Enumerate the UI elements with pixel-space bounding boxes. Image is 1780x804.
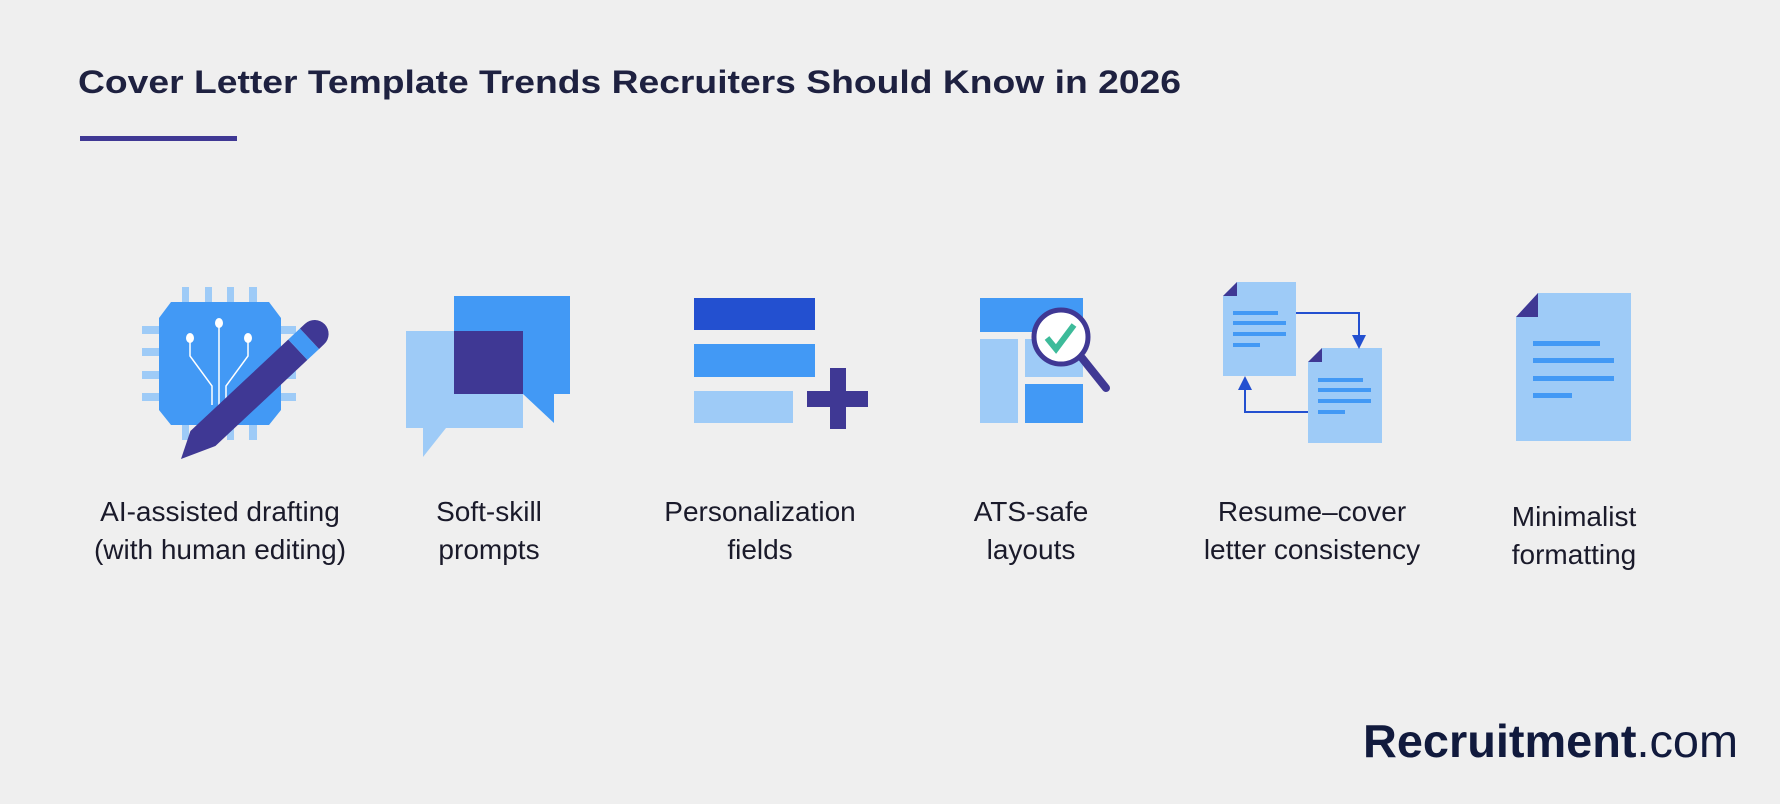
title: Cover Letter Template Trends Recruiters Should Know in 2026 [78, 64, 1181, 100]
icon: speech bubbles [406, 296, 570, 457]
label: personalization fields: fields [727, 534, 793, 565]
icon: ATS layout with magnifier [980, 298, 1106, 423]
label: ATS-safe layouts: layouts [987, 534, 1075, 565]
label: minimalist formatting: formatting [1512, 539, 1636, 570]
icon: resume and cover letter documents [1223, 282, 1382, 443]
label: soft-skill prompts: prompts [438, 534, 540, 565]
label: AI-assisted drafting: (with human editing) [94, 534, 346, 565]
label: resume-cover letter consistency: letter consistency [1204, 534, 1420, 565]
label: AI-assisted drafting: AI-assisted drafting [100, 496, 340, 527]
label: soft-skill prompts: Soft-skill [436, 496, 542, 527]
label: resume-cover letter consistency: Resume–cover [1218, 496, 1406, 527]
icon: personalization fields [694, 298, 868, 429]
title underline [80, 136, 237, 141]
labels [94, 496, 1636, 570]
logo: Recruitment.com [1363, 715, 1738, 767]
label: ATS-safe layouts: ATS-safe [974, 496, 1088, 527]
icon: minimalist document [1516, 293, 1631, 441]
icon: AI chip with pencil [142, 287, 334, 469]
label: personalization fields: Personalization [664, 496, 856, 527]
label: minimalist formatting: Minimalist [1512, 501, 1636, 532]
